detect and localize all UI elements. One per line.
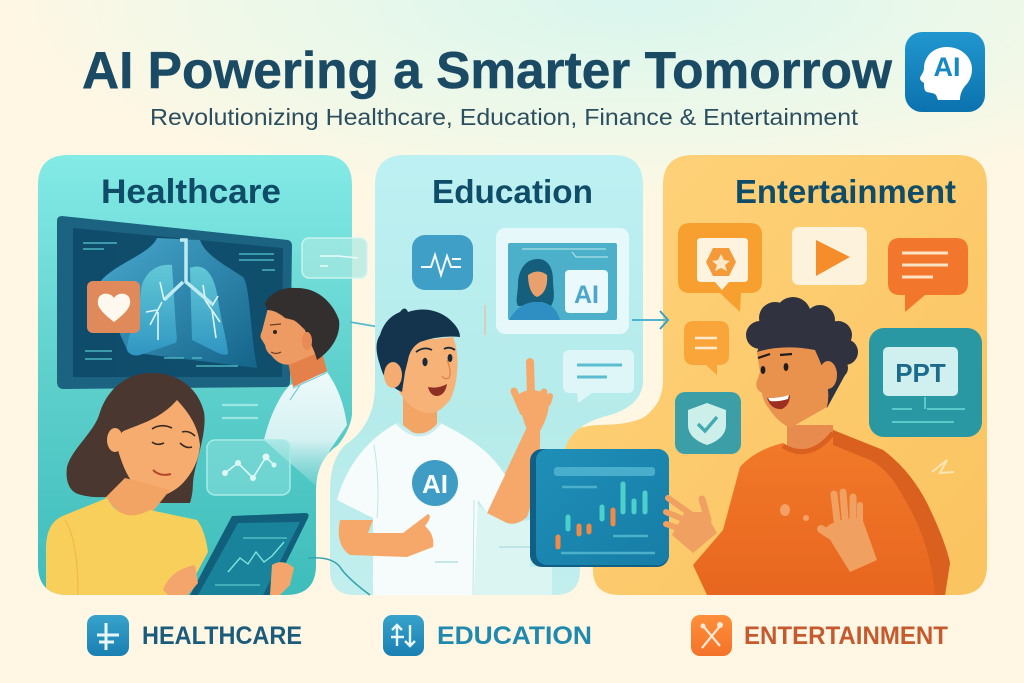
legend: education — [383, 615, 592, 656]
tablet — [190, 513, 309, 595]
panel: entertainment background — [560, 155, 987, 595]
panel: entertainment content — [666, 173, 982, 595]
speech bubble — [563, 350, 634, 403]
heading: education: Education — [432, 173, 593, 210]
raised hand — [514, 362, 550, 431]
student — [337, 308, 552, 595]
text lines — [222, 405, 258, 418]
icon: waveform tile — [412, 235, 473, 290]
face — [756, 347, 828, 428]
legend: entertainment — [691, 615, 948, 656]
icon: education — [383, 615, 424, 656]
screen card with AI tutor — [496, 228, 629, 334]
arrow — [632, 311, 668, 329]
icon: PPT tile: PPT — [895, 358, 946, 388]
monitor with lung scan — [57, 216, 292, 389]
icon: PPT tile — [869, 328, 982, 437]
sweater — [693, 430, 950, 595]
connector: doctor to student — [350, 322, 385, 328]
panel: education — [308, 155, 669, 595]
subtitle: Revolutionizing Healthcare, Education, Finance & Entertainment — [150, 104, 859, 130]
presenter — [666, 297, 950, 595]
icon: healthcare — [87, 615, 129, 656]
hand: open palm — [821, 492, 877, 572]
glass card: top right — [302, 238, 367, 278]
curly hair — [746, 297, 858, 408]
icon: small speech bubble — [684, 321, 729, 375]
icon: AI head: AI — [934, 52, 960, 82]
icon: red speech bubble — [888, 238, 968, 312]
heading: healthcare: Healthcare — [101, 173, 281, 211]
doctor — [260, 288, 347, 485]
divider — [484, 305, 486, 335]
chart tablet — [530, 449, 669, 567]
icon: AI head — [905, 32, 985, 112]
heading: entertainment: Entertainment — [735, 173, 956, 210]
label: education: EDUCATION — [437, 622, 592, 650]
legend: healthcare — [87, 615, 302, 656]
woman with tablet — [46, 373, 309, 595]
icon: heart — [87, 281, 140, 333]
shirt badge: AI: AI — [422, 469, 448, 499]
icon: badge bubble — [678, 223, 762, 312]
icon: shield tile — [675, 392, 741, 454]
curved connector — [308, 558, 370, 595]
shirt badge: AI — [412, 460, 458, 506]
hand: pointing — [666, 498, 717, 553]
panel: healthcare — [38, 155, 352, 595]
glass card: line chart — [207, 440, 290, 495]
squiggle — [932, 460, 954, 473]
icon: entertainment — [691, 615, 732, 656]
title: AI Powering a Smarter Tomorrow — [82, 42, 893, 100]
label: healthcare: HEALTHCARE — [142, 622, 302, 650]
label: entertainment: ENTERTAINMENT — [744, 622, 948, 650]
screen card with AI tutor: AI — [574, 281, 599, 309]
icon: play tile — [792, 227, 867, 285]
